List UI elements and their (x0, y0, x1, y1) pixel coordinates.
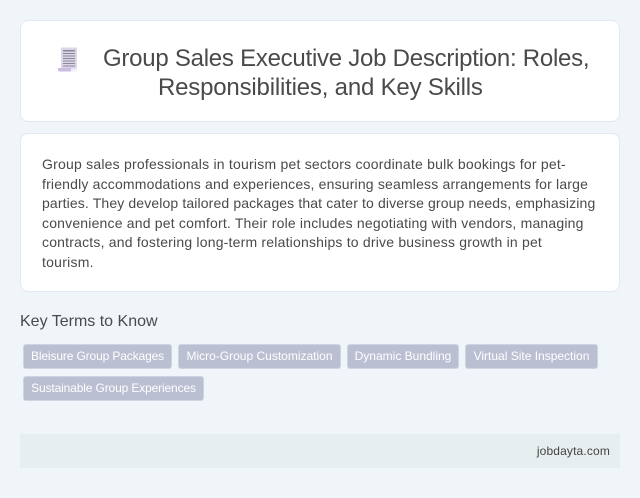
tag (465, 344, 598, 369)
tag: Virtual Site Inspection (474, 349, 589, 363)
tag: Dynamic Bundling (355, 349, 451, 363)
text block: description: contracts, and fostering long-term relationships to drive business growth in pet (42, 234, 542, 250)
text block: description: tourism. (42, 254, 94, 270)
tag (347, 344, 459, 369)
text block: description: parties. They develop tailored packages that cater to diverse group needs, emphasizing (42, 194, 595, 210)
tag: Sustainable Group Experiences (31, 381, 196, 395)
panel: description card (20, 133, 620, 292)
title: Responsibilities, and Key Skills (158, 74, 483, 101)
icon: paper receipt scroll (58, 48, 77, 72)
heading: key terms: Key Terms to Know (20, 313, 158, 330)
tag (23, 376, 204, 401)
text block: description: Group sales professionals in tourism pet sectors coordinate bulk bookings for pet- (42, 156, 566, 172)
panel: title card (20, 20, 620, 122)
tag (23, 344, 172, 369)
tag: Micro-Group Customization (186, 349, 333, 363)
tag (178, 344, 341, 369)
text block: description (42, 156, 595, 270)
title (103, 45, 589, 101)
footer source text: jobdayta.com (537, 444, 610, 458)
tag list: key terms (23, 344, 598, 401)
tag: Bleisure Group Packages (31, 349, 164, 363)
title: Group Sales Executive Job Description: Roles, (103, 45, 589, 72)
text block: description: friendly accommodations and experiences, ensuring seamless arrangements for large (42, 176, 588, 192)
footer bar (20, 434, 620, 468)
text block: description: convenience and pet comfort. Their role includes negotiating with vendors, managing (42, 214, 584, 230)
